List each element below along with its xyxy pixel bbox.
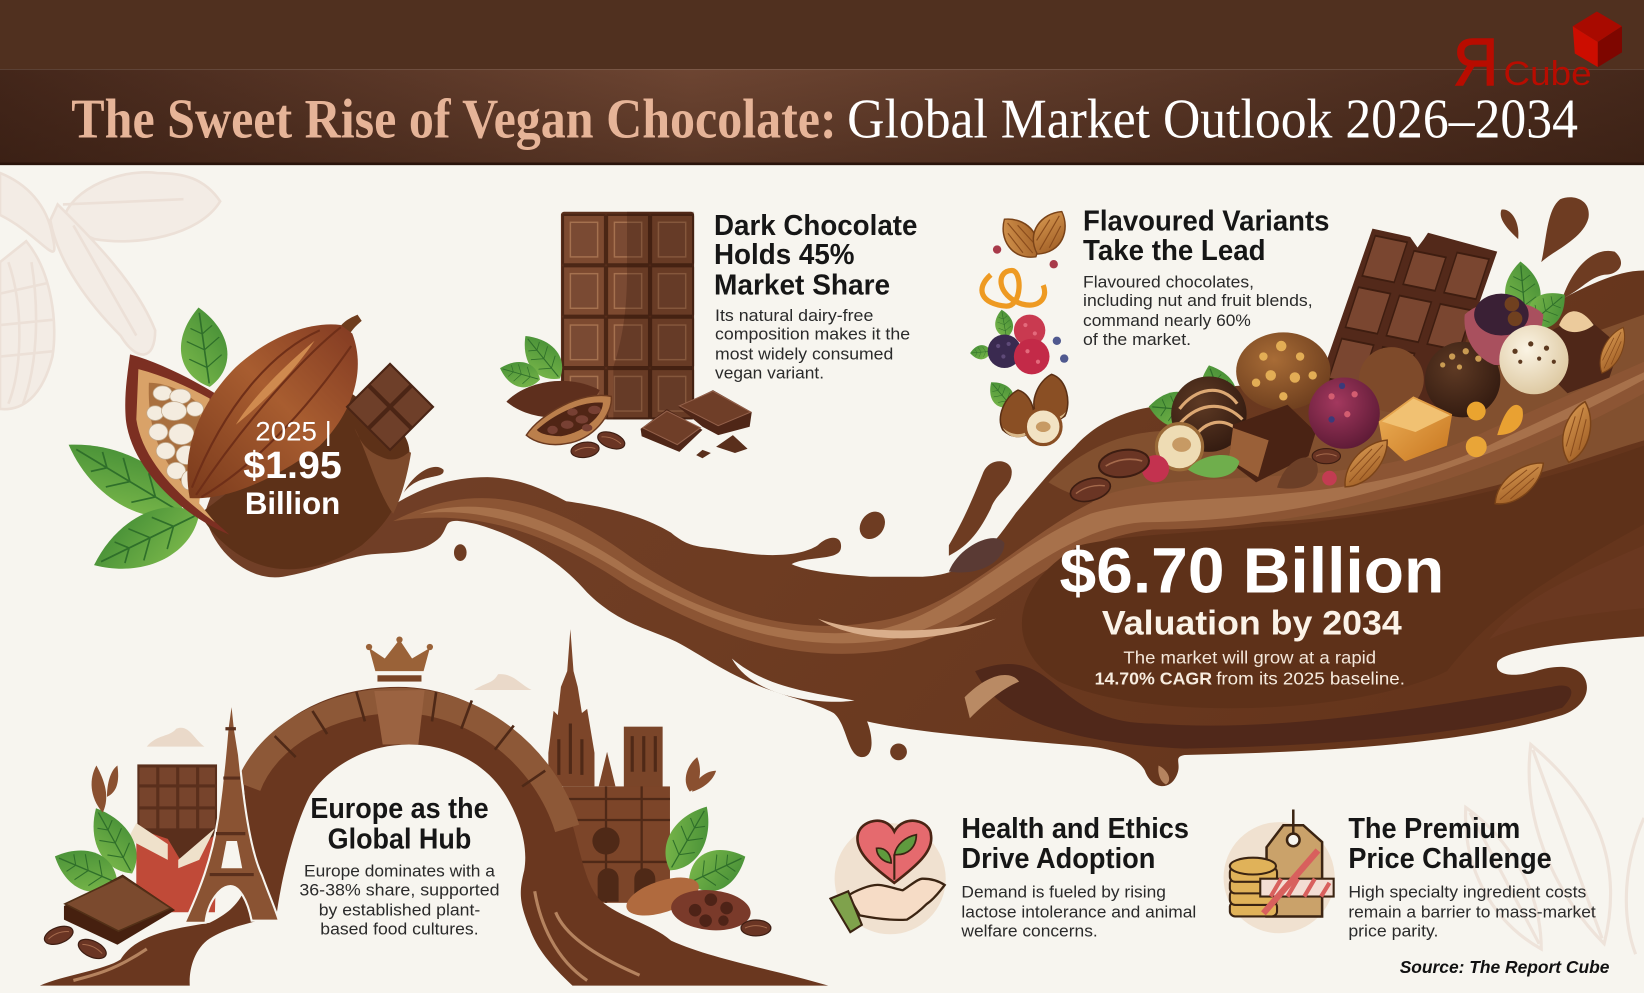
icon: leaf sprigs bbox=[92, 757, 716, 813]
icon: price tag and coins bbox=[1224, 809, 1335, 933]
icon: pralines bbox=[1171, 294, 1632, 482]
watermark: leaves bottom-right bbox=[1466, 744, 1644, 954]
icon: chocolate bar with wrapper bbox=[128, 764, 217, 912]
text: 2025 value: Billion bbox=[245, 486, 340, 521]
icon: leaves bbox=[56, 304, 232, 588]
big number: $6.70 Billion bbox=[1059, 534, 1444, 606]
title band bbox=[0, 69, 1644, 165]
icon: chocolate square bbox=[346, 362, 435, 451]
body text: High specialty ingredient costs bbox=[1348, 883, 1586, 902]
heading: Flavoured Variants bbox=[1083, 205, 1329, 237]
description: The market will grow at a rapid bbox=[1123, 648, 1376, 668]
panel: 2025 value with cocoa pod bbox=[56, 304, 435, 588]
body text: price parity. bbox=[1348, 921, 1438, 940]
icon: berries bbox=[970, 245, 1068, 374]
title text: Global Market Outlook 2026–2034 bbox=[847, 88, 1578, 150]
icon: Eiffel tower bbox=[185, 698, 279, 923]
body text: by established plant- bbox=[319, 900, 480, 919]
icon: chocolate blob bbox=[199, 393, 410, 569]
body text: of the market. bbox=[1083, 330, 1191, 349]
heading bbox=[714, 209, 917, 301]
panel: Europe bbox=[40, 629, 828, 986]
icon: chocolate bar bbox=[1319, 229, 1497, 419]
CAGR line: from its 2025 baseline. bbox=[1216, 669, 1405, 689]
heading: Drive Adoption bbox=[961, 842, 1155, 874]
body text bbox=[299, 862, 500, 938]
body text: Its natural dairy-free bbox=[715, 306, 873, 325]
heading: Health and Ethics bbox=[961, 812, 1189, 844]
panel: premium price bbox=[1224, 809, 1596, 940]
body text: Demand is fueled by rising bbox=[961, 883, 1166, 902]
heading: Take the Lead bbox=[1083, 234, 1266, 266]
body text: composition makes it the bbox=[715, 325, 910, 344]
heading: The Premium bbox=[1348, 812, 1520, 844]
icon: cocoa pod bbox=[187, 315, 362, 498]
heading bbox=[310, 792, 489, 854]
icon: almonds bbox=[994, 204, 1074, 266]
body text: Flavoured chocolates, bbox=[1083, 272, 1254, 291]
icon: chocolate chunks bbox=[641, 390, 752, 458]
icon: leaves bbox=[497, 327, 571, 392]
flow highlights bbox=[818, 619, 996, 638]
chocolate and confection pile bbox=[1068, 229, 1632, 513]
heading bbox=[961, 812, 1189, 874]
heading: Dark Chocolate bbox=[714, 209, 917, 241]
body text: lactose intolerance and animal bbox=[961, 903, 1196, 922]
heading: Global Hub bbox=[328, 822, 471, 854]
body text: 36-38% share, supported bbox=[299, 880, 500, 899]
logo: RCube: Я bbox=[1453, 25, 1498, 100]
icon: nuts and beans bbox=[1068, 398, 1597, 513]
droplets bbox=[404, 197, 1621, 760]
heading: Market Share bbox=[714, 269, 890, 301]
text: 2025 value: 2025 | bbox=[255, 415, 332, 446]
body text: Europe dominates with a bbox=[304, 862, 496, 881]
icon: crown bbox=[366, 636, 433, 682]
icon: leaves bbox=[1147, 260, 1575, 429]
white notch bbox=[1489, 545, 1644, 640]
panel: health and ethics bbox=[830, 812, 1196, 940]
icon: open cocoa pod bbox=[125, 354, 230, 535]
icon: hazelnuts bbox=[983, 374, 1068, 445]
panel: flavoured variants bbox=[970, 204, 1329, 445]
body text bbox=[715, 306, 910, 383]
body text bbox=[960, 883, 1196, 940]
body text: most widely consumed bbox=[715, 345, 893, 364]
icon: cocoa pod with beans bbox=[506, 381, 627, 459]
dark lower body bbox=[1022, 446, 1644, 708]
chocolate river bbox=[204, 271, 1644, 786]
title text: The Sweet Rise of Vegan Chocolate: bbox=[71, 88, 837, 150]
top header strip bbox=[0, 0, 1644, 69]
source note: Source: The Report Cube bbox=[1400, 957, 1609, 977]
icon: cocoa pod and beans bbox=[622, 870, 771, 936]
title text bbox=[71, 88, 1578, 150]
icon: orange peel bbox=[982, 271, 1045, 306]
watermark: cocoa branch top-left bbox=[0, 172, 220, 409]
CAGR line: 14.70% CAGR bbox=[1095, 669, 1212, 689]
icon: chocolate chunk bbox=[64, 875, 175, 945]
panel: dark chocolate bbox=[497, 209, 917, 459]
body text bbox=[1083, 272, 1313, 349]
body text: including nut and fruit blends, bbox=[1083, 291, 1313, 310]
CAGR line bbox=[1095, 669, 1405, 689]
body text: command nearly 60% bbox=[1083, 311, 1251, 330]
icon: leaves bbox=[47, 798, 753, 901]
pile base lighter layer bbox=[1048, 315, 1644, 522]
panel: 2034 valuation bbox=[1059, 534, 1444, 689]
icon: flavour ingredients column bbox=[970, 204, 1074, 445]
heading: Price Challenge bbox=[1348, 842, 1552, 874]
heading: Europe as the bbox=[310, 792, 489, 824]
text: 2025 value: $1.95 bbox=[243, 444, 342, 486]
subheading: Valuation by 2034 bbox=[1102, 604, 1403, 642]
icon: cathedral bbox=[548, 629, 670, 903]
white slit bbox=[732, 659, 855, 702]
body text: vegan variant. bbox=[715, 364, 824, 383]
body text: remain a barrier to mass-market bbox=[1348, 903, 1596, 922]
icon: chocolate arch bbox=[40, 687, 828, 986]
body text bbox=[1348, 883, 1596, 940]
body text: welfare concerns. bbox=[960, 921, 1098, 940]
logo: RCube: Cube bbox=[1504, 55, 1592, 93]
text: 2025 value bbox=[243, 415, 342, 521]
heading bbox=[1083, 205, 1329, 266]
icon: heart and hand bbox=[830, 821, 946, 934]
icon: clouds bbox=[147, 674, 532, 747]
icon: chocolate bar bbox=[561, 212, 694, 419]
body text: based food cultures. bbox=[320, 919, 479, 938]
light flow band bbox=[393, 362, 1644, 654]
heading bbox=[1348, 812, 1552, 874]
heading: Holds 45% bbox=[714, 238, 855, 270]
logo: RCube bbox=[1453, 12, 1622, 100]
